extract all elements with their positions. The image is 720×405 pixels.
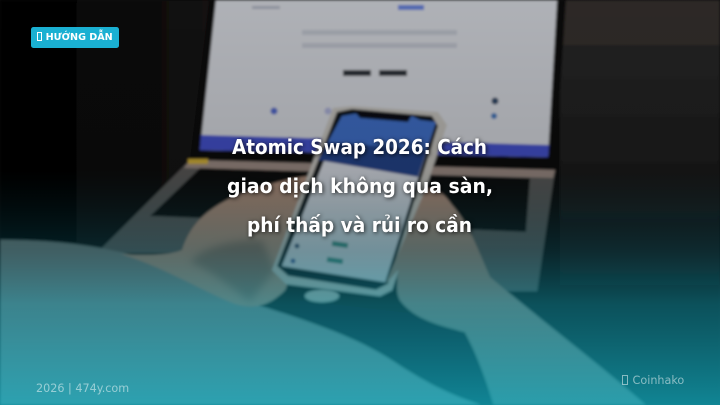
left hand — [120, 176, 325, 306]
keyboard — [150, 168, 530, 232]
title: phí thấp và rủi ro cần — [247, 213, 472, 237]
laptop screen — [200, 0, 557, 157]
laptop lid bezel — [190, 0, 566, 170]
table lower right — [0, 285, 720, 405]
laptop screen dock — [200, 135, 549, 157]
right hand and arm — [385, 188, 645, 405]
laptop deck — [97, 160, 555, 291]
phone case — [272, 106, 447, 296]
badge: HƯỚNG DẪN — [31, 27, 119, 48]
phone list buttons — [332, 241, 348, 248]
footer: year and site: 2026 | 474y.com — [36, 382, 129, 395]
phone finger below — [305, 290, 339, 302]
phone screen — [282, 116, 436, 282]
badge: HƯỚNG DẪN: HƯỚNG DẪN — [46, 32, 113, 43]
source credit: Coinhako: Coinhako — [633, 374, 684, 387]
phone app header — [318, 116, 436, 177]
table right of hand — [300, 300, 500, 405]
title: Atomic Swap 2026: Cách — [232, 135, 487, 159]
phone notch — [353, 110, 412, 122]
screen content — [252, 5, 498, 119]
phone bezel — [277, 109, 438, 290]
title: giao dịch không qua sàn, — [227, 174, 493, 198]
sleeve — [0, 240, 480, 405]
